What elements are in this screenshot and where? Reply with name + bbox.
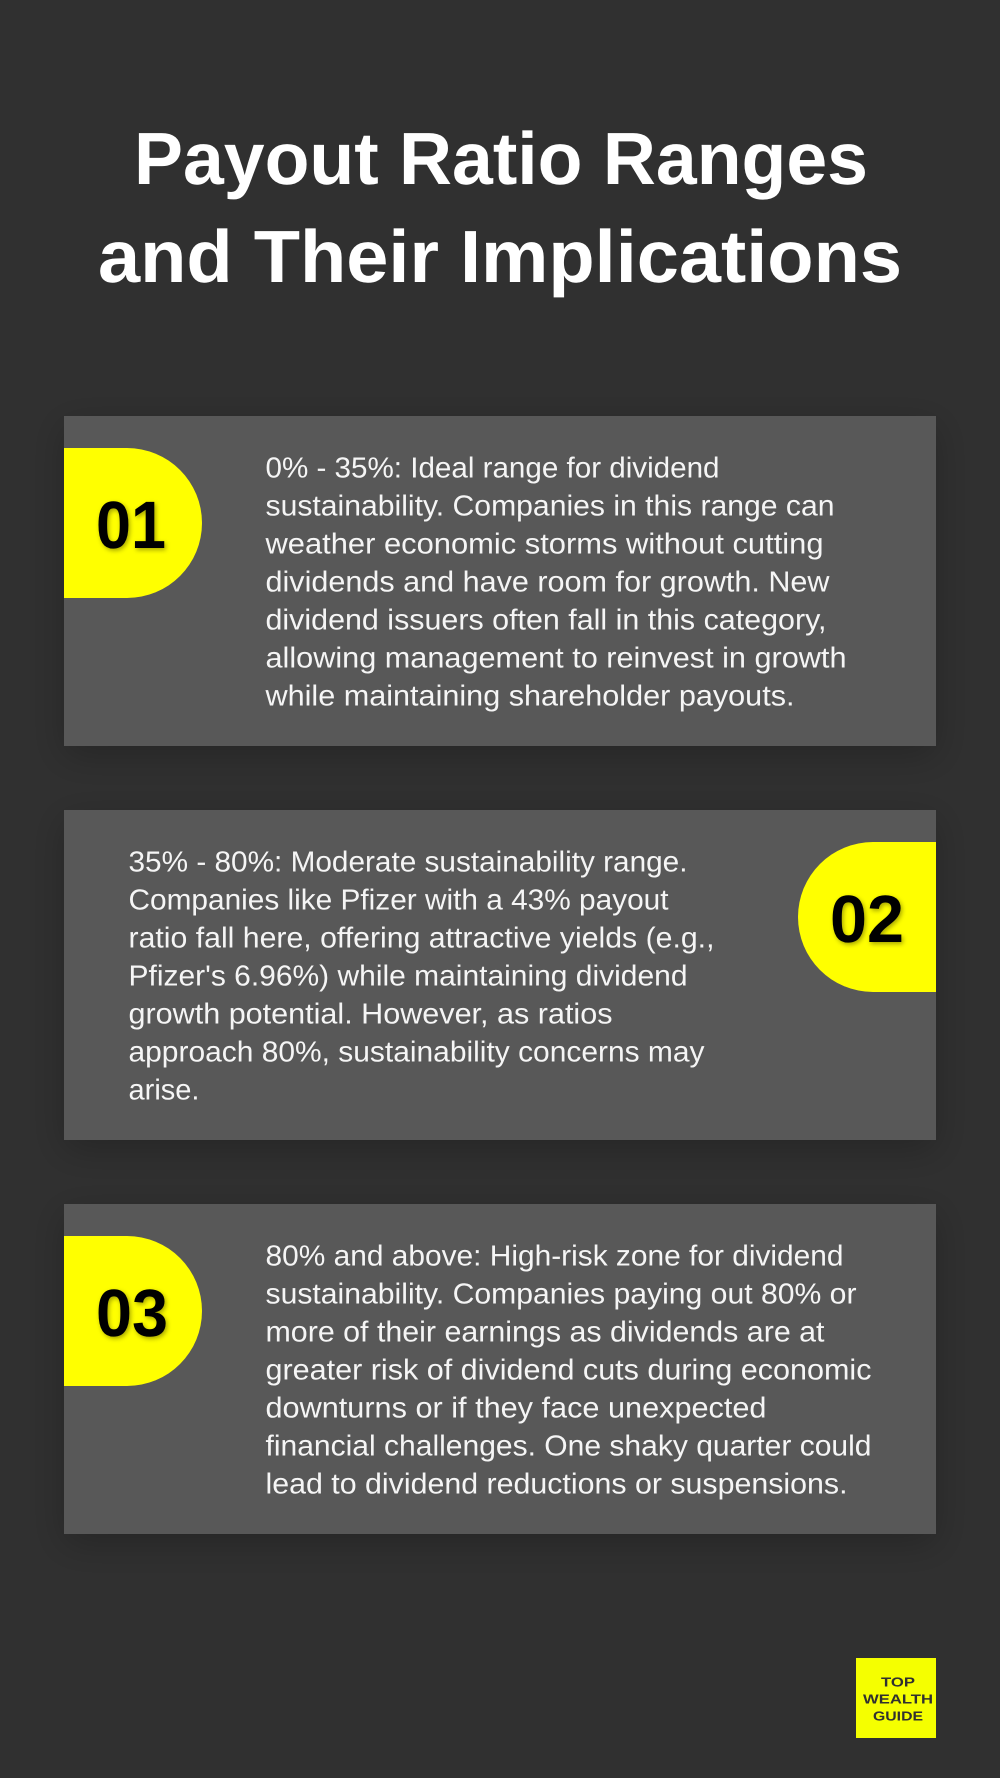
text block 3: more of their earnings as dividends are at (266, 1316, 824, 1348)
title (98, 117, 902, 298)
text block 3: financial challenges. One shaky quarter could (266, 1430, 872, 1462)
card background 1 (64, 416, 936, 746)
text block 1: allowing management to reinvest in growth (266, 642, 846, 674)
text block 2: growth potential. However, as ratios (128, 998, 612, 1030)
number badge 02 (798, 842, 936, 992)
number 01: 01 (96, 488, 166, 563)
text block 3: lead to dividend reductions or suspensions. (266, 1468, 848, 1500)
text block 3: greater risk of dividend cuts during economic (266, 1354, 872, 1386)
text block 1: dividend issuers often fall in this category, (266, 604, 826, 636)
text block 2 (128, 846, 714, 1106)
text block 2: ratio fall here, offering attractive yields (e.g., (128, 922, 714, 954)
card background 2 (64, 810, 936, 1140)
logo: Top Wealth Guide: WEALTH (863, 1692, 933, 1706)
logo: Top Wealth Guide: GUIDE (873, 1708, 923, 1724)
logo: Top Wealth Guide: TOP (881, 1674, 915, 1690)
text block 1: dividends and have room for growth. New (266, 566, 831, 598)
logo: Top Wealth Guide (856, 1658, 936, 1738)
title: Payout Ratio Ranges (134, 117, 868, 200)
text block 1 (264, 452, 846, 712)
title: and Their Implications (98, 215, 902, 298)
number 03: 03 (96, 1276, 168, 1351)
text block 2: Companies like Pfizer with a 43% payout (128, 884, 668, 916)
text block 2: arise. (128, 1074, 200, 1106)
text block 3: downturns or if they face unexpected (266, 1392, 766, 1424)
text block 3: 80% and above: High-risk zone for dividend (266, 1240, 844, 1272)
text block 2: approach 80%, sustainability concerns may (128, 1036, 705, 1068)
number badge 01 (64, 448, 202, 598)
text block 1: while maintaining shareholder payouts. (264, 680, 795, 712)
panel: 35% - 80% range (64, 810, 936, 1140)
panel: 80% and above range (64, 1204, 936, 1534)
text block 1: sustainability. Companies in this range can (266, 490, 834, 522)
text block 1: weather economic storms without cutting (264, 528, 823, 560)
text block 3: sustainability. Companies paying out 80% or (266, 1278, 857, 1310)
card background 3 (64, 1204, 936, 1534)
text block 2: Pfizer's 6.96%) while maintaining dividend (128, 960, 688, 992)
number badge 03 (64, 1236, 202, 1386)
text block 1: 0% - 35%: Ideal range for dividend (266, 452, 720, 484)
text block 3 (266, 1240, 872, 1500)
text block 2: 35% - 80%: Moderate sustainability range. (128, 846, 688, 878)
number 02: 02 (830, 882, 904, 957)
panel: 0% - 35% range (64, 416, 936, 746)
